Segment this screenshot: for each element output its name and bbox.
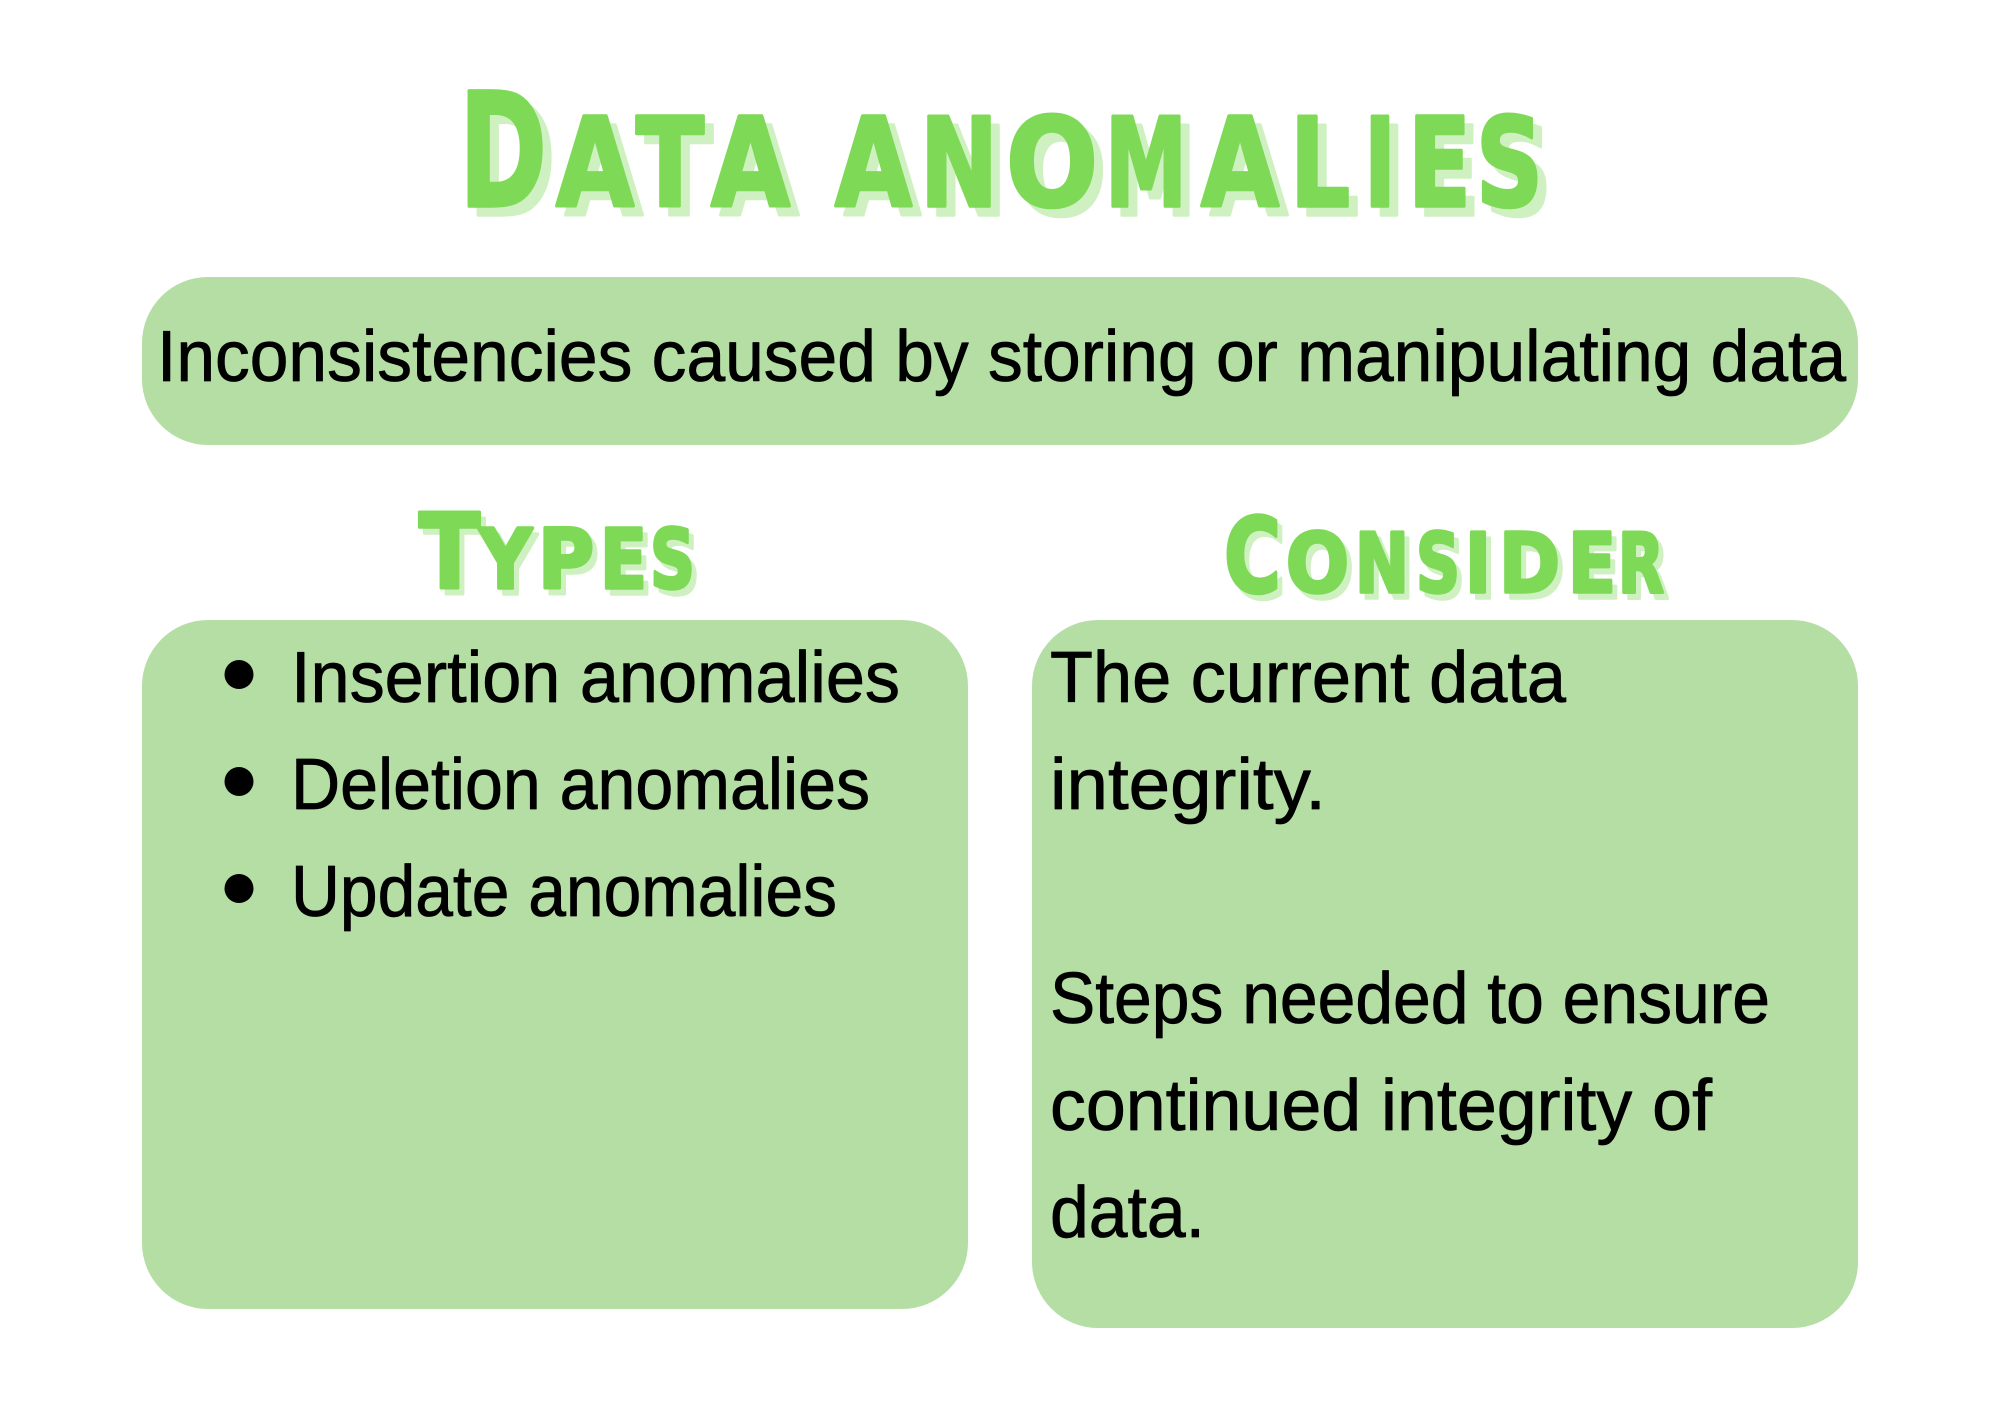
consider text: data integrity: integrity.	[1050, 745, 1326, 825]
heading: consider: S	[1416, 517, 1460, 612]
title: N	[920, 93, 998, 236]
heading: types: S	[650, 513, 695, 608]
title: A	[835, 93, 912, 236]
heading: types: T	[419, 493, 480, 613]
heading: types: E	[600, 513, 647, 608]
banner text: Inconsistencies caused by storing or manipulating data	[157, 317, 1847, 397]
heading: types: P	[538, 513, 594, 608]
title: A	[556, 93, 634, 236]
consider text: steps needed	[1050, 959, 1770, 1253]
heading: consider: O	[1286, 517, 1349, 612]
heading: consider: N	[1355, 517, 1409, 612]
bullet: insertion	[224, 660, 254, 689]
title: O	[1006, 93, 1098, 236]
banner background	[142, 277, 1858, 445]
title: M	[1105, 93, 1187, 236]
heading: consider	[1224, 497, 1664, 617]
bullet: deletion	[224, 767, 254, 796]
title: D	[459, 60, 547, 244]
heading: consider: C	[1224, 497, 1281, 617]
title: S	[1476, 93, 1543, 236]
list item: update: Update anomalies	[291, 852, 837, 932]
consider text: steps needed: data.	[1050, 1173, 1205, 1253]
title: A	[1201, 93, 1279, 236]
consider text: data integrity	[1050, 638, 1567, 825]
panel: definition banner	[142, 277, 1858, 445]
heading: types	[419, 493, 695, 613]
heading: consider: R	[1618, 517, 1664, 612]
title: I	[1364, 93, 1396, 236]
panel: consider	[1032, 620, 1858, 1328]
list item: insertion: Insertion anomalies	[291, 638, 900, 718]
consider text: steps needed: continued integrity of	[1050, 1066, 1713, 1146]
list item: deletion: Deletion anomalies	[291, 745, 870, 825]
consider text: data integrity: The current data	[1050, 638, 1567, 718]
bullet: update	[224, 874, 254, 903]
title: T	[636, 93, 704, 236]
title: E	[1408, 93, 1471, 236]
title: L	[1290, 93, 1350, 236]
heading: types: Y	[478, 513, 533, 608]
heading: consider: E	[1568, 517, 1616, 612]
types background	[142, 620, 968, 1309]
title: A	[711, 93, 790, 236]
heading: consider: I	[1465, 517, 1491, 612]
consider background	[1032, 620, 1858, 1328]
title	[459, 60, 1543, 244]
consider text: steps needed: Steps needed to ensure	[1050, 959, 1770, 1039]
panel: types	[142, 620, 968, 1309]
heading: consider: D	[1499, 517, 1560, 612]
